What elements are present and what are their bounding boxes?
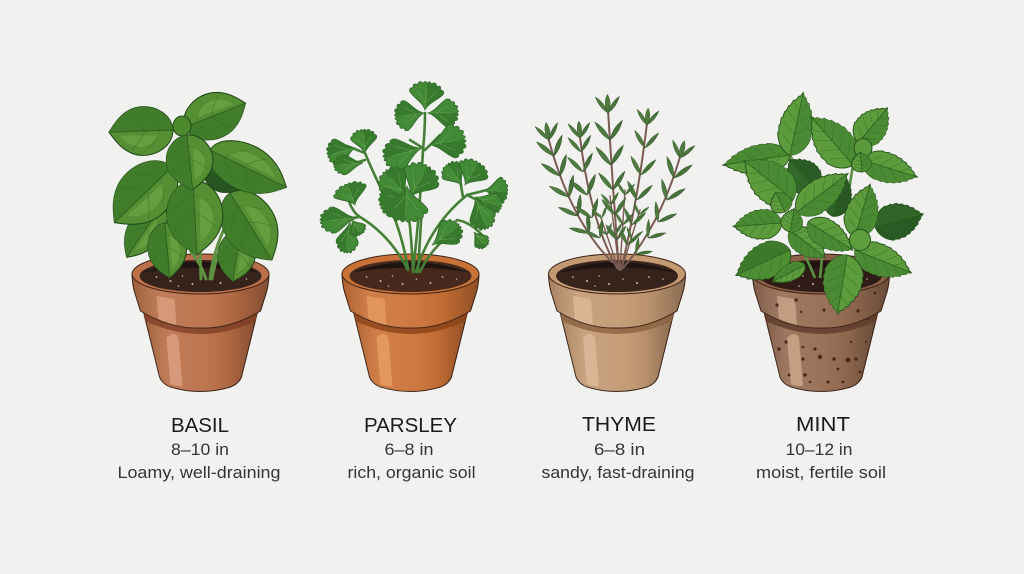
thyme pot (548, 254, 686, 392)
panel: parsley (319, 80, 509, 391)
label: basil (118, 415, 280, 482)
panel: thyme (535, 94, 696, 392)
mint plant (721, 89, 928, 317)
parsley pot (342, 254, 479, 392)
parsley plant (319, 80, 509, 272)
label: parsley (348, 415, 476, 482)
panel: basil (96, 82, 296, 391)
basil plant (96, 82, 296, 284)
label: thyme: sandy, fast-draining (542, 463, 694, 482)
mint pot (752, 254, 890, 392)
label: parsley: 6–8 in (384, 440, 434, 459)
label: basil: BASIL (171, 415, 229, 437)
label: parsley: rich, organic soil (348, 463, 476, 482)
label: mint: 10–12 in (786, 440, 852, 459)
label: mint: MINT (796, 414, 850, 436)
label: basil: Loamy, well-draining (118, 463, 280, 482)
label: thyme: 6–8 in (594, 440, 645, 459)
label: mint (756, 414, 886, 482)
label: basil: 8–10 in (171, 440, 229, 459)
label: mint: moist, fertile soil (756, 463, 886, 482)
label: parsley: PARSLEY (364, 415, 457, 437)
mint pot speckles (775, 292, 876, 384)
label: thyme (542, 414, 694, 482)
basil pot (132, 254, 269, 392)
thyme plant (535, 94, 696, 270)
panel: mint (721, 89, 928, 392)
label: thyme: THYME (582, 414, 656, 436)
